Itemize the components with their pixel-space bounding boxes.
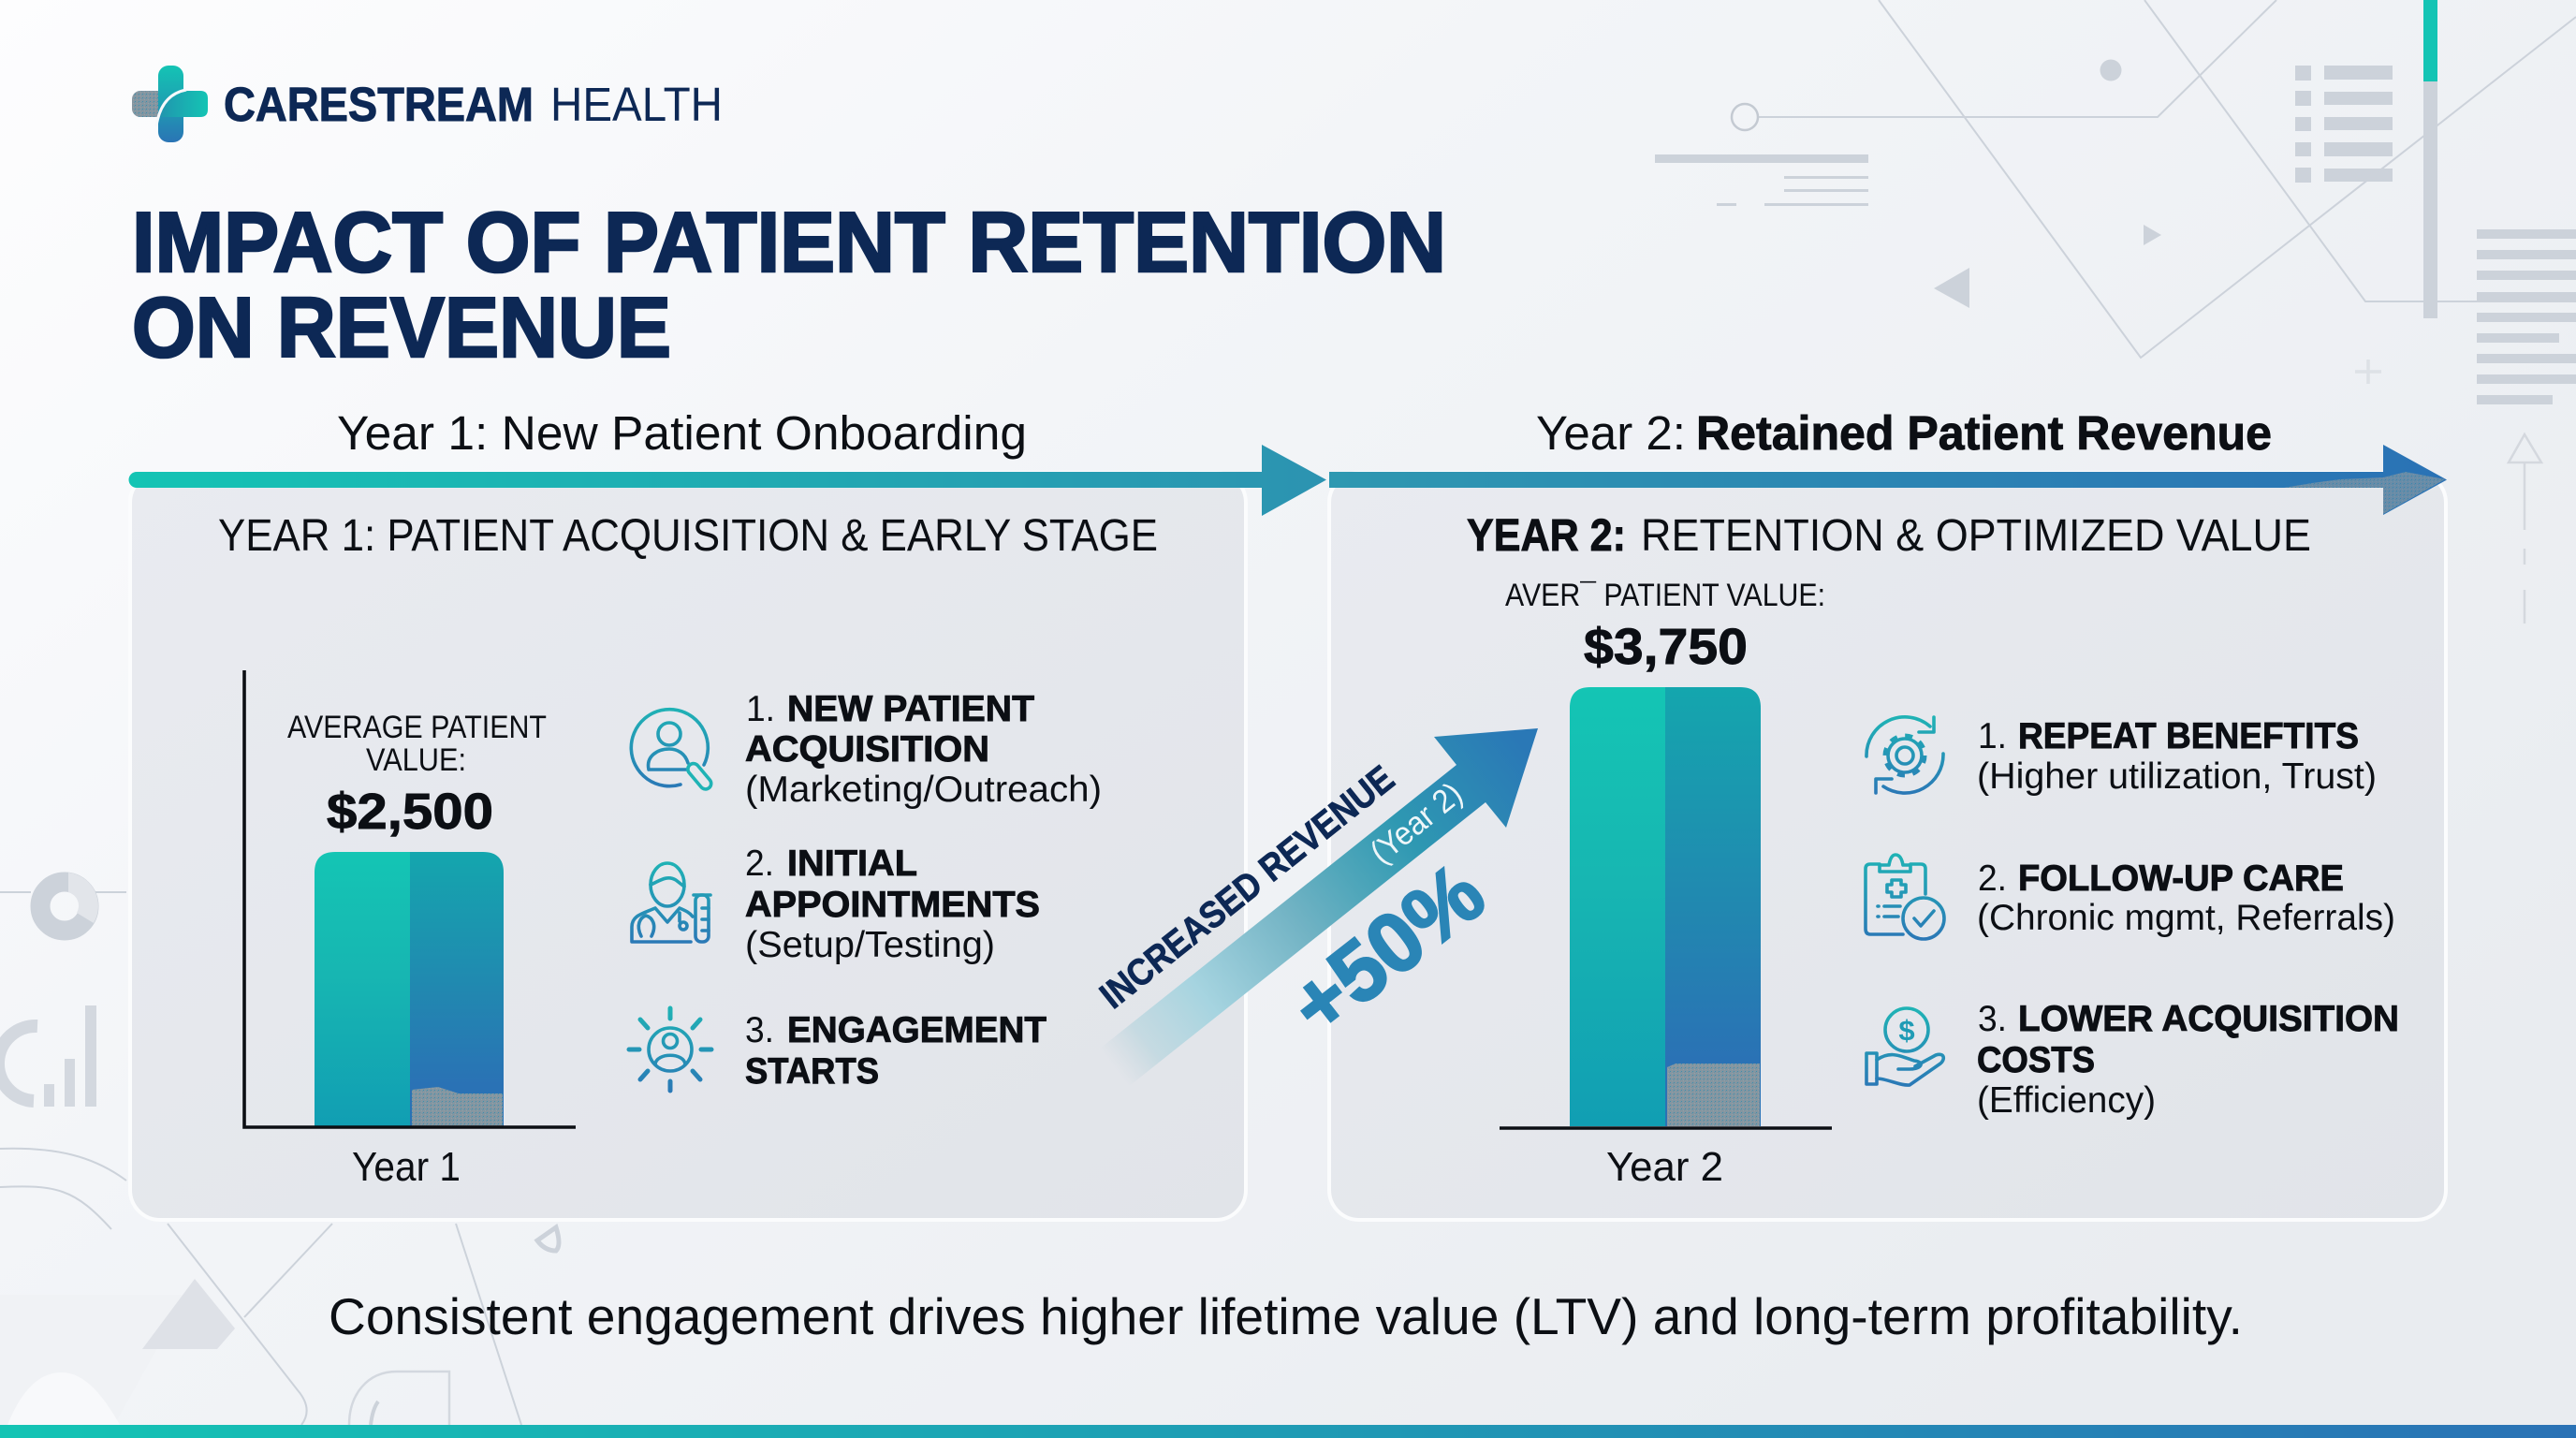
value label: year 1	[287, 710, 547, 840]
arrow: year 1 timeline	[129, 445, 1326, 516]
list item: follow-up care: 2.	[1978, 858, 2007, 899]
icon: clipboard with check	[1866, 855, 1944, 939]
panel heading: year 1: YEAR 1: PATIENT ACQUISITION & EARLY STAGE	[218, 511, 1158, 561]
logo	[132, 66, 723, 142]
value label: year 1: $2,500	[327, 784, 493, 840]
icon: patient search	[631, 710, 713, 791]
title	[132, 196, 1446, 375]
list item: initial appointments: (Setup/Testing)	[745, 925, 995, 965]
footer statement: Consistent engagement drives higher lifetime value (LTV) and long-term profitability.	[329, 1287, 2243, 1345]
list item: repeat benefits	[1866, 716, 2377, 797]
icon: doctor with test tube	[632, 863, 710, 942]
list item: follow-up care	[1866, 855, 2395, 939]
title: IMPACT OF PATIENT RETENTION	[132, 196, 1446, 290]
list item: repeat benefits: REPEAT BENEFTITS	[2018, 716, 2359, 756]
list item: new patient acquisition: (Marketing/Outreach)	[745, 770, 1102, 810]
list item: repeat benefits: (Higher utilization, Trust)	[1977, 756, 2377, 797]
logo wordmark	[224, 78, 723, 131]
list item: new patient acquisition: ACQUISITION	[745, 729, 989, 770]
logo icon: medical cross	[132, 66, 208, 142]
list item: initial appointments: 2.	[745, 844, 774, 884]
list item: lower acquisition costs	[1866, 999, 2399, 1121]
list item: lower acquisition costs: (Efficiency)	[1977, 1080, 2156, 1121]
list item: new patient acquisition: NEW PATIENT	[787, 689, 1034, 729]
arrow label: increased revenue: INCREASED REVENUE	[1092, 758, 1402, 1017]
list item: lower acquisition costs: COSTS	[1977, 1040, 2095, 1080]
list item: engagement starts: ENGAGEMENT	[787, 1010, 1046, 1050]
list item: initial appointments: INITIAL	[787, 844, 917, 884]
value label: year 1: VALUE:	[366, 742, 466, 778]
timeline heading: year 2: Retained Patient Revenue	[1696, 406, 2272, 460]
panel heading: year 2: RETENTION & OPTIMIZED VALUE	[1641, 511, 2311, 561]
icon: engagement burst	[629, 1008, 711, 1091]
list item: repeat benefits: 1.	[1978, 716, 2007, 756]
list item: engagement starts	[629, 1008, 1046, 1092]
panel heading: year 2: YEAR 2:	[1467, 511, 1626, 561]
background decoration: left chart marks	[0, 873, 126, 1229]
list item: engagement starts: STARTS	[745, 1051, 879, 1092]
bar chart: year 1	[244, 670, 576, 1190]
bar chart: year 2: Year 2	[1606, 1144, 1723, 1190]
arrow: year 2 timeline	[1329, 445, 2447, 515]
list item: initial appointments	[632, 844, 1040, 965]
arrow label: year 2: (Year 2)	[1363, 775, 1470, 871]
list item: follow-up care: (Chronic mgmt, Referrals)	[1977, 898, 2395, 938]
list item: initial appointments: APPOINTMENTS	[745, 885, 1040, 925]
bar chart: year 2	[1500, 687, 1832, 1190]
list item: follow-up care: FOLLOW-UP CARE	[2018, 858, 2344, 899]
list item: lower acquisition costs: 3.	[1978, 999, 2007, 1039]
value label: year 2: $3,750	[1584, 619, 1748, 675]
icon text: dollar sign: $	[1898, 1014, 1915, 1047]
panel: year 2	[1329, 473, 2446, 1220]
callout: +50%: +50%	[1273, 846, 1501, 1053]
background decoration: bottom left shapes	[0, 1224, 559, 1425]
icon: hand holding coin	[1866, 1008, 1943, 1085]
list item: new patient acquisition	[631, 689, 1102, 810]
icon: gear with cycle arrows	[1866, 717, 1943, 793]
background decoration: top right tech lines	[1655, 0, 2576, 624]
logo wordmark: HEALTH	[550, 78, 723, 131]
list item: new patient acquisition: 1.	[746, 689, 775, 729]
timeline heading: year 2: Year 2:	[1536, 406, 1686, 460]
title: ON REVENUE	[132, 281, 671, 375]
panel: year 1	[130, 473, 1246, 1220]
logo wordmark: CARESTREAM	[224, 78, 534, 131]
list item: lower acquisition costs: LOWER ACQUISITION	[2018, 999, 2399, 1039]
list item: engagement starts: 3.	[745, 1010, 774, 1050]
footer gradient band	[0, 1425, 2576, 1438]
timeline heading: year 1: Year 1: New Patient Onboarding	[337, 406, 1027, 460]
value label: year 2	[1505, 578, 1825, 675]
value label: year 1: AVERAGE PATIENT	[287, 710, 547, 745]
bar chart: year 1: Year 1	[352, 1144, 461, 1190]
arrow: increased revenue	[1092, 728, 1538, 1088]
value label: year 2: AVER¯ PATIENT VALUE:	[1505, 578, 1825, 613]
